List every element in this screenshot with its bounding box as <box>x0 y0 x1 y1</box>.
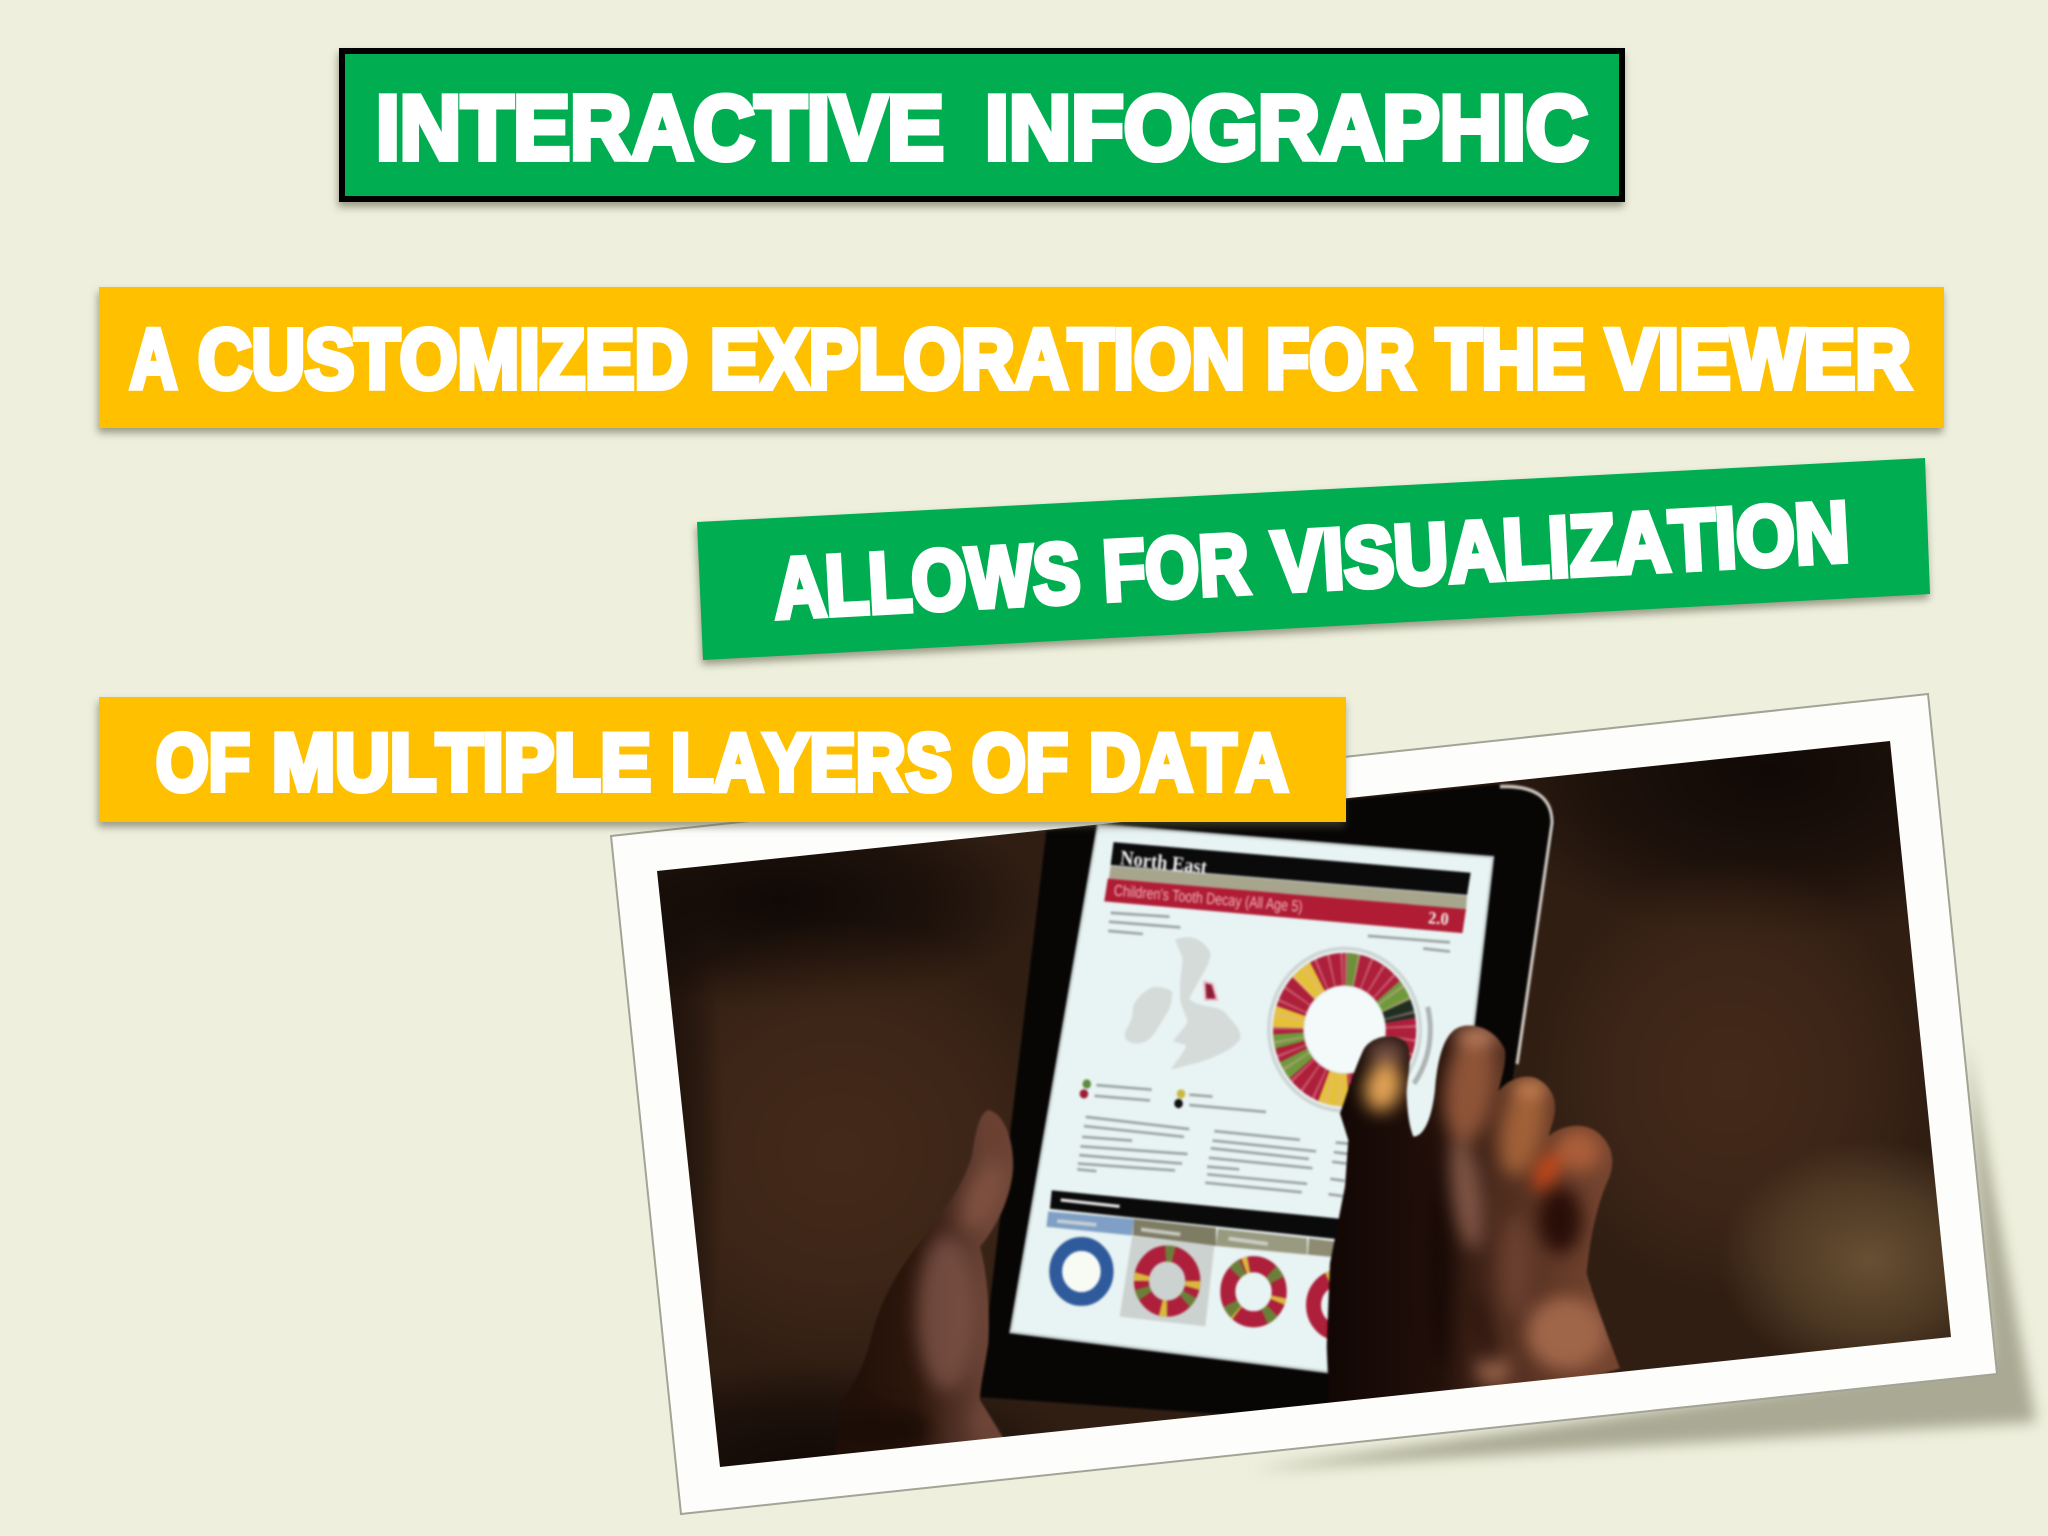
screen red band title: Children's Tooth Decay (All Age 5) <box>1113 882 1303 916</box>
title text: INTERACTIVE <box>376 78 944 179</box>
tab: blue <box>1046 1211 1134 1236</box>
banner: customized exploration <box>99 287 1944 428</box>
left hand <box>836 1110 1014 1454</box>
banner text: FOR <box>1266 312 1415 406</box>
map highlighted region <box>1204 982 1217 1000</box>
tab label lines <box>1057 1221 1268 1244</box>
banner text: A <box>130 312 177 406</box>
tablet edge highlight <box>1500 787 1552 1064</box>
banner text: EXPLORATION <box>710 312 1245 406</box>
title box <box>342 51 1622 199</box>
screen small text lines <box>1077 913 1450 1196</box>
band label line <box>1061 1200 1120 1206</box>
banner text <box>772 485 1851 637</box>
banner text <box>156 718 1288 808</box>
title text <box>376 78 1588 179</box>
tablet screen <box>1011 825 1493 1372</box>
lower black band <box>1050 1190 1343 1239</box>
grey panel behind donut <box>1120 1236 1214 1326</box>
tablet body <box>979 785 1555 1431</box>
screen tan band <box>1109 866 1467 909</box>
banner text: MULTIPLE <box>272 718 651 808</box>
yellow bar <box>99 287 1944 428</box>
banner text: DATA <box>1089 718 1288 808</box>
photo dark background <box>657 741 1951 1467</box>
UK map <box>1125 937 1240 1070</box>
screen black header <box>1111 842 1471 895</box>
small donut 2 <box>1228 1264 1279 1319</box>
yellow bar <box>99 697 1346 822</box>
banner: allows for visualization <box>697 458 1930 660</box>
banner text: ALLOWS <box>772 526 1083 637</box>
small donut 3 <box>1304 1270 1332 1340</box>
screen heading: North East <box>1119 846 1208 879</box>
banner text: VISUALIZATION <box>1270 485 1851 610</box>
banner text: CUSTOMIZED <box>198 312 688 406</box>
tablet and screen contents <box>979 785 1555 1431</box>
banner text: LAYERS <box>671 718 952 808</box>
small donut 1 <box>1141 1253 1193 1309</box>
banner: multiple layers of data <box>99 697 1346 822</box>
banner text: OF <box>156 718 250 808</box>
panel: framed photo of tablet in hands <box>610 692 1997 1516</box>
photo: hands holding tablet <box>657 741 1951 1467</box>
tab: khaki <box>1216 1229 1307 1255</box>
banner text: VIEWER <box>1606 312 1911 406</box>
legend swatches <box>1080 1079 1185 1108</box>
banner text: OF <box>972 718 1068 808</box>
title banner <box>342 51 1622 199</box>
right hand <box>1325 1024 1620 1402</box>
tab: partial <box>1308 1238 1339 1257</box>
banner text <box>130 312 1911 406</box>
banner text: FOR <box>1100 517 1251 619</box>
photo white frame <box>611 694 1997 1514</box>
screen red band <box>1104 878 1466 933</box>
tab: olive <box>1133 1219 1216 1246</box>
banner text: THE <box>1436 312 1585 406</box>
green tilted bar <box>697 458 1930 660</box>
main donut chart <box>1266 946 1434 1113</box>
screen score: 2.0 <box>1427 908 1449 929</box>
photo frame shadow <box>1250 1040 2036 1470</box>
blue donut <box>1056 1244 1107 1299</box>
title text: INFOGRAPHIC <box>985 78 1588 179</box>
